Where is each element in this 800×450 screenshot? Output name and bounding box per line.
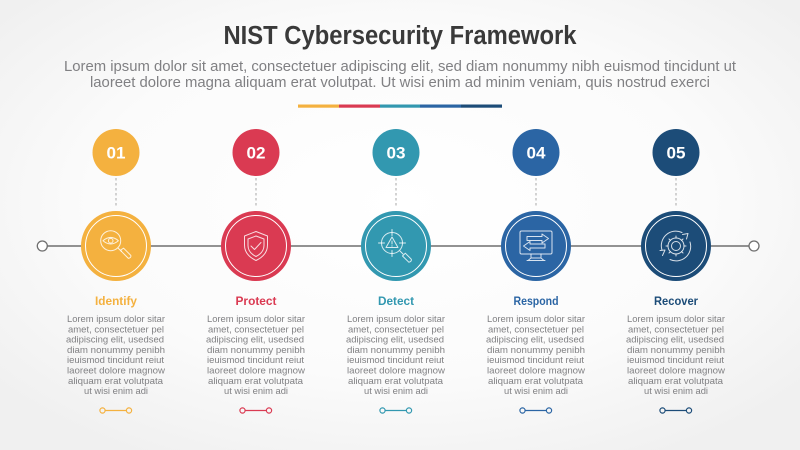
description text: aliquam erat volutpata bbox=[488, 375, 584, 386]
description text: laoreet dolore magnow bbox=[67, 364, 165, 376]
timeline line with end markers bbox=[37, 241, 759, 251]
description text: Lorem ipsum dolor sitar bbox=[207, 313, 305, 324]
description text: aliquam erat volutpata bbox=[348, 375, 444, 386]
icon: gear with circular arrows bbox=[641, 211, 711, 281]
small connector marker bbox=[520, 408, 552, 413]
description text: adipiscing elit, usedsed bbox=[626, 334, 724, 345]
number badge 02: 02 bbox=[246, 144, 266, 162]
number badge 01 bbox=[92, 129, 140, 176]
intro text bbox=[64, 59, 736, 91]
label: Protect: Protect bbox=[236, 294, 277, 308]
description text: adipiscing elit, usedsed bbox=[346, 334, 444, 345]
description text: amet, consectetuer pel bbox=[348, 323, 444, 334]
description text: ut wisi enim adi bbox=[644, 385, 708, 396]
description text: laoreet dolore magnow bbox=[627, 364, 725, 376]
number badge 04 bbox=[512, 129, 560, 176]
description text: laoreet dolore magnow bbox=[487, 364, 585, 376]
description text: ut wisi enim adi bbox=[504, 385, 568, 396]
description text bbox=[206, 313, 305, 396]
label: Recover: Recover bbox=[654, 294, 698, 308]
description text: diam nonummy penibh bbox=[627, 344, 725, 355]
step 5: Recover bbox=[626, 129, 725, 413]
description text: Lorem ipsum dolor sitar bbox=[487, 313, 585, 324]
title: NIST Cybersecurity Framework bbox=[224, 22, 577, 50]
description text: diam nonummy penibh bbox=[207, 344, 305, 355]
number badge 04: 04 bbox=[526, 144, 546, 162]
description text: ut wisi enim adi bbox=[364, 385, 428, 396]
intro text: laoreet dolore magna aliquam erat volutpat. Ut wisi enim ad minim veniam, quis nostrud exerci bbox=[90, 75, 710, 91]
description text: ieuismod tincidunt reiut bbox=[487, 354, 584, 365]
small connector marker bbox=[100, 408, 132, 413]
description text: amet, consectetuer pel bbox=[488, 323, 584, 334]
step 4: Respond bbox=[486, 129, 585, 413]
description text: ut wisi enim adi bbox=[84, 385, 148, 396]
description text: ieuismod tincidunt reiut bbox=[347, 354, 444, 365]
description text: aliquam erat volutpata bbox=[628, 375, 724, 386]
description text: laoreet dolore magnow bbox=[207, 364, 305, 376]
colour bar divider bbox=[298, 104, 502, 108]
description text: diam nonummy penibh bbox=[487, 344, 585, 355]
description text bbox=[346, 313, 445, 396]
description text: amet, consectetuer pel bbox=[208, 323, 304, 334]
description text: laoreet dolore magnow bbox=[347, 364, 445, 376]
step 1: Identify bbox=[66, 129, 165, 413]
step 3: Detect bbox=[346, 129, 445, 413]
description text: aliquam erat volutpata bbox=[68, 375, 164, 386]
description text bbox=[486, 313, 585, 396]
description text: diam nonummy penibh bbox=[67, 344, 165, 355]
icon: magnifier with eye bbox=[81, 211, 151, 281]
description text: Lorem ipsum dolor sitar bbox=[627, 313, 725, 324]
description text: adipiscing elit, usedsed bbox=[486, 334, 584, 345]
description text: ieuismod tincidunt reiut bbox=[67, 354, 164, 365]
description text: ut wisi enim adi bbox=[224, 385, 288, 396]
small connector marker bbox=[240, 408, 272, 413]
step 2: Protect bbox=[206, 129, 305, 413]
description text: diam nonummy penibh bbox=[347, 344, 445, 355]
icon: monitor with arrows bbox=[501, 211, 571, 281]
icon: target with warning and magnifier bbox=[361, 211, 431, 281]
description text: adipiscing elit, usedsed bbox=[206, 334, 304, 345]
description text: aliquam erat volutpata bbox=[208, 375, 304, 386]
description text: ieuismod tincidunt reiut bbox=[627, 354, 724, 365]
description text bbox=[66, 313, 165, 396]
number badge 05: 05 bbox=[666, 144, 686, 162]
number badge 02 bbox=[232, 129, 280, 176]
description text: Lorem ipsum dolor sitar bbox=[67, 313, 165, 324]
description text: adipiscing elit, usedsed bbox=[66, 334, 164, 345]
small connector marker bbox=[380, 408, 412, 413]
number badge 05 bbox=[652, 129, 700, 176]
description text bbox=[626, 313, 725, 396]
icon: shield with check bbox=[221, 211, 291, 281]
label: Identify: Identify bbox=[95, 294, 137, 308]
description text: ieuismod tincidunt reiut bbox=[207, 354, 304, 365]
label: Detect: Detect bbox=[378, 294, 414, 308]
number badge 01: 01 bbox=[106, 144, 126, 162]
description text: amet, consectetuer pel bbox=[68, 323, 164, 334]
description text: amet, consectetuer pel bbox=[628, 323, 724, 334]
label: Respond: Respond bbox=[514, 294, 558, 308]
number badge 03 bbox=[372, 129, 420, 176]
small connector marker bbox=[660, 408, 692, 413]
description text: Lorem ipsum dolor sitar bbox=[347, 313, 445, 324]
intro text: Lorem ipsum dolor sit amet, consectetuer adipiscing elit, sed diam nonummy nibh euismod tincidunt ut bbox=[64, 59, 736, 75]
number badge 03: 03 bbox=[386, 144, 406, 162]
